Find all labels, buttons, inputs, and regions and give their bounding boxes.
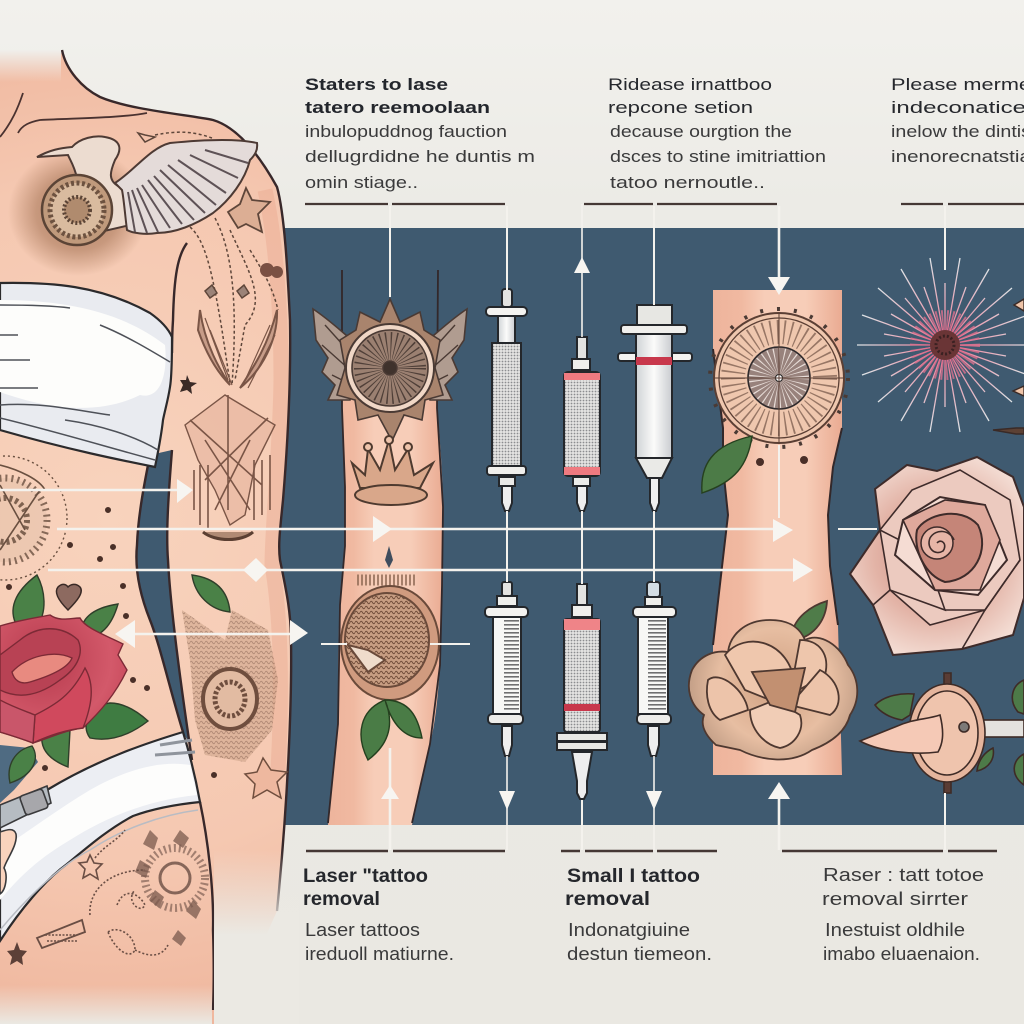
header text: column 3: inenorecnatstia [891, 147, 1024, 166]
bottom text: column 3: removal sirrter [822, 889, 968, 909]
header text: column 2: Ridease irnattboo [608, 75, 772, 94]
navy band [120, 228, 1024, 825]
arrow: long mid 1 [57, 516, 793, 542]
tattoo: leaves [361, 700, 422, 760]
header text: column 1: omin stiage.. [305, 173, 418, 192]
header text: column 3: indeconatice [891, 98, 1024, 117]
navy gap between torso and arm [136, 450, 190, 745]
bottom text: column 3: Raser : tatt totoe [823, 865, 984, 885]
bottom text: column 2: destun tiemeon. [567, 944, 712, 964]
right-edge needle tips [993, 299, 1024, 434]
tattoo: dial [710, 309, 848, 447]
tattoo: hip swirl [7, 830, 205, 965]
body outlines [62, 50, 291, 1010]
arrow: down left [499, 756, 515, 850]
bottom text: column 2: Small I tattoo [567, 866, 700, 887]
bottom text: column 3: Inestuist oldhile [825, 920, 965, 940]
handle [983, 720, 1024, 737]
syringe: top 1 [486, 289, 527, 511]
collarbone lines [0, 93, 147, 137]
tattoo: mandala on ribs [0, 456, 67, 580]
arrows [0, 204, 945, 850]
bottom text: column 2: Indonatgiuine [568, 920, 690, 940]
header text: column 1: tatero reemoolaan [305, 98, 490, 117]
header text: column 3 [891, 75, 1024, 166]
header text: column 1: Staters to lase [305, 75, 448, 94]
arrow: up to strip [768, 782, 790, 850]
tattoo: dots [9, 510, 214, 775]
arm shape [328, 395, 443, 825]
connector lines [321, 206, 945, 850]
small dots [760, 460, 804, 462]
tattoo: scribble text [357, 574, 415, 586]
arm shading [265, 190, 281, 770]
arrow: bandage arrow [0, 479, 193, 503]
forearm strip with dial and flower [689, 290, 857, 775]
header text: column 2 [608, 75, 826, 192]
header rules [305, 203, 1024, 205]
tattoo: flower [689, 601, 857, 759]
tattoo: crown [352, 436, 433, 505]
bottom text: column 2 [565, 866, 712, 964]
tattoo: winged figure on arm [185, 310, 277, 540]
bandage [0, 283, 172, 467]
arrow: long mid 2 [48, 558, 813, 582]
arrow: down to strip [768, 206, 790, 295]
body [909, 684, 985, 782]
navy patch by rose [0, 745, 38, 803]
bottom text: column 3: imabo eluaenaion. [823, 944, 980, 964]
header text: column 2: tatoo nernoutle.. [610, 173, 765, 192]
arm strip with tattoos [313, 270, 467, 825]
bottom text: column 1: ireduoll matiurne. [305, 944, 454, 964]
header text: column 1: inbulopuddnog fauction [305, 122, 507, 141]
bottom rules [306, 850, 997, 852]
tattoo: star and dotted lines [138, 132, 283, 394]
header text: column 2: decause ourgtion the [610, 122, 792, 141]
tattoo: arm leaf [192, 575, 230, 612]
header text: column 3: inelow the dintis [891, 122, 1024, 141]
leaves [875, 694, 914, 720]
cone [860, 715, 943, 753]
tattoo: leaves and rose [0, 575, 148, 783]
header text: column 3: Please merme [891, 75, 1024, 94]
figure: torso and arm [0, 50, 299, 1024]
bottom text: column 1 [303, 866, 454, 964]
large rose [850, 457, 1024, 655]
syringe: bottom 1 [485, 582, 528, 756]
tattoo: heart [56, 584, 81, 610]
sunburst laser graphic [857, 258, 1024, 432]
syringe: bottom 3 [633, 582, 676, 756]
header text: column 2: dsces to stine imitriattion [610, 147, 826, 166]
bars [944, 673, 951, 701]
tattoo: winged sun [313, 299, 467, 441]
arrow: up from arm [381, 748, 399, 850]
arrow: up on syringe [574, 204, 590, 337]
syringe: top 2 [564, 337, 600, 511]
syringe: top 3 [618, 305, 692, 511]
skin strip [713, 290, 842, 775]
header text: column 2: repcone setion [608, 98, 753, 117]
underwear [0, 732, 200, 941]
arrow: down right [646, 756, 662, 850]
header text: column 1 [305, 75, 535, 192]
tattoo: lower arm mandala [182, 610, 287, 798]
bottom text: column 1: Laser "tattoo [303, 866, 428, 887]
header text: column 1: dellugrdidne he duntis m [305, 147, 535, 166]
skin silhouette [0, 50, 291, 1024]
bottom text: column 3 [822, 865, 984, 964]
syringe: bottom 2 [557, 584, 607, 799]
bottom text: column 1: removal [303, 889, 380, 910]
syringes [485, 289, 692, 799]
tattoo: bird with medallion [8, 136, 257, 276]
tattoo: beast medallion [341, 586, 439, 700]
arrow: double headed [115, 620, 308, 648]
bottom text: column 1: Laser tattoos [305, 920, 420, 940]
laser tool and hand [0, 786, 51, 894]
laser device with cone [860, 673, 1024, 793]
bottom text: column 2: removal [565, 889, 650, 910]
skin fades [0, 985, 212, 1024]
leaf [702, 436, 752, 493]
tattoo: small mark [385, 546, 393, 568]
